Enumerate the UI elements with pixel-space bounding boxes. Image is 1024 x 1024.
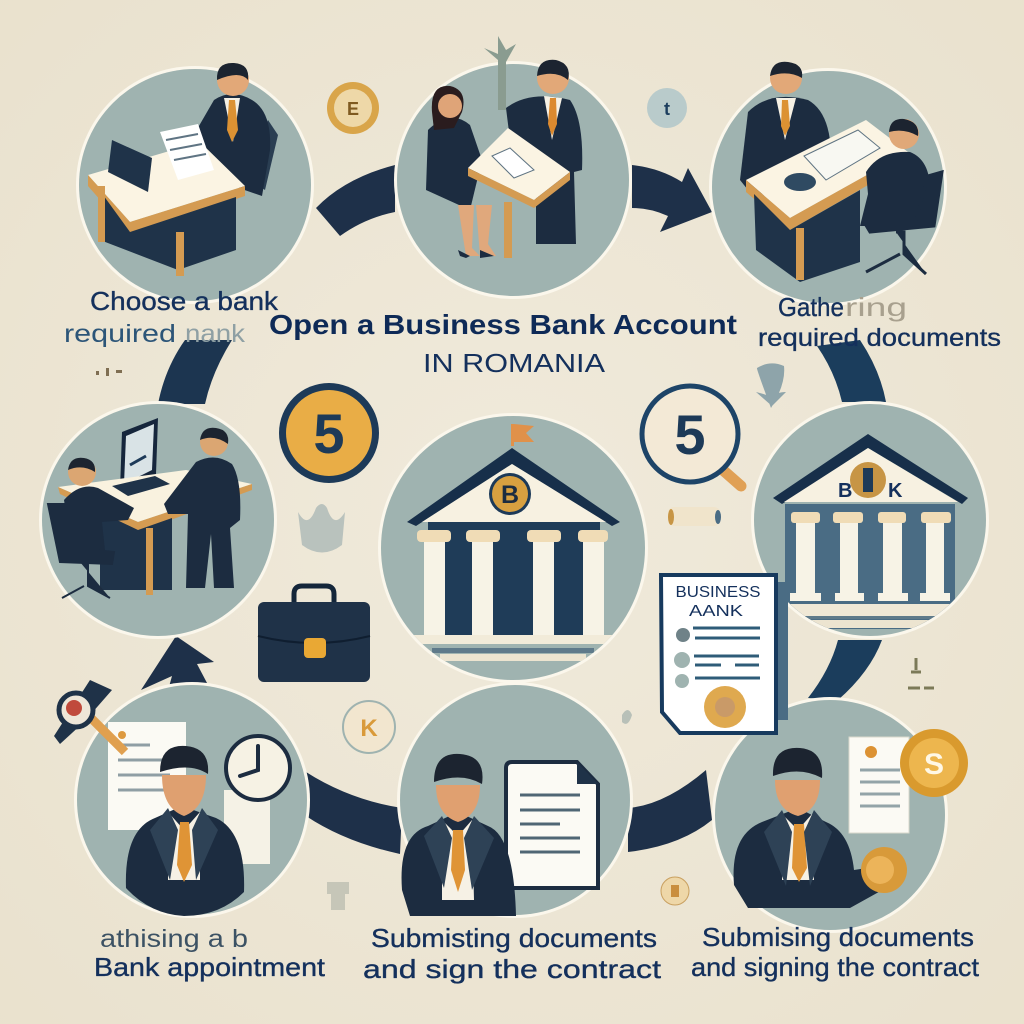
- small marks left: [96, 368, 122, 376]
- document: [506, 762, 598, 888]
- label: booking: athising a b: [100, 925, 248, 953]
- document: [108, 722, 186, 830]
- pediment: K: [888, 480, 903, 502]
- icon: small faded coin: [661, 877, 689, 905]
- pediment: B: [838, 480, 852, 502]
- icon: business document: [661, 575, 788, 733]
- label: submit documents: [363, 923, 662, 984]
- badge: number 5 gold: 5: [313, 402, 345, 465]
- laptop and papers: [108, 124, 214, 192]
- label: submit documents: Submisting documents: [371, 923, 657, 953]
- figure: businessman: [734, 748, 886, 908]
- icon: magnifier with 5: [642, 386, 741, 486]
- figure: standing man: [740, 62, 830, 200]
- second document: [224, 790, 270, 864]
- label: sign contract: [691, 922, 980, 982]
- label: choose a bank: nank: [185, 320, 246, 348]
- coin in hand: [861, 847, 907, 893]
- pediment: [773, 434, 968, 504]
- arrow: middle right to bottom right: [808, 640, 882, 700]
- small mark: center: [622, 710, 632, 724]
- pediment: [407, 448, 620, 526]
- icon: small leaf: [756, 363, 786, 408]
- small mark: lower right: [908, 658, 934, 688]
- icon: business document: AANK: [689, 603, 743, 620]
- title: [269, 309, 737, 378]
- panel: book appointment: [74, 682, 310, 918]
- label: booking: Bank appointment: [94, 952, 326, 982]
- icon: dollar coin: S: [924, 748, 944, 781]
- arrow: bottom left up to middle left: [141, 636, 216, 712]
- figure: man: [506, 60, 582, 244]
- label: choose a bank: [64, 286, 279, 348]
- arrow: top left to top middle: [316, 165, 395, 236]
- icon: coin outline: [343, 701, 395, 753]
- figure: seated client and chair: [860, 119, 942, 274]
- icon: dollar coin: [900, 729, 968, 797]
- columns: [790, 512, 951, 601]
- icon: grey crown: [298, 504, 345, 552]
- badge: number 5 gold: [279, 383, 379, 483]
- panel: sign contract: [712, 697, 948, 933]
- panel: choose a bank: [76, 63, 314, 304]
- decorative coin top right: [647, 88, 687, 128]
- label: gather documents: required documents: [758, 324, 1001, 352]
- icon: clock: [226, 736, 290, 800]
- panel: meeting at bank: [394, 36, 632, 299]
- icon: small scroll: [668, 507, 721, 526]
- label: choose a bank: Choose a bank: [90, 286, 279, 316]
- label: gather documents: ring: [845, 292, 907, 322]
- arrow: bottom middle to bottom left: [306, 772, 402, 854]
- label: gather documents: Gathe: [778, 292, 844, 322]
- document: [849, 737, 909, 833]
- figure: seated clerk and chair: [48, 458, 134, 598]
- desk: [58, 470, 252, 595]
- columns: [417, 530, 608, 636]
- desk: [88, 142, 245, 276]
- panel: online application: [39, 401, 277, 639]
- facade shadow: [428, 520, 600, 640]
- figure: woman: [426, 86, 496, 258]
- figure: businessman: [402, 754, 516, 916]
- flag: [511, 424, 534, 446]
- icon: small grey mark: [327, 882, 349, 910]
- facade shadow: [785, 504, 955, 629]
- icon: briefcase: [258, 586, 370, 682]
- label: choose a bank: required: [64, 320, 176, 348]
- panel: central bank: [378, 413, 648, 683]
- label: gather documents: [758, 292, 1001, 352]
- icon: magnifier with 5: 5: [674, 403, 706, 466]
- arrow: bottom right to bottom middle: [628, 770, 712, 852]
- icon: business document: BUSINESS: [676, 584, 760, 601]
- title: IN ROMANIA: [423, 348, 606, 378]
- panel: submit documents: [397, 682, 633, 918]
- steps: [790, 604, 950, 628]
- arrow: middle left to top left: [158, 340, 232, 404]
- icon: magnifier red: [54, 680, 125, 752]
- label: booking: [94, 925, 326, 982]
- computer monitor: [120, 418, 158, 490]
- icon: coin outline: K: [360, 715, 378, 742]
- pediment coin: [489, 473, 531, 515]
- figure: businessman: [126, 746, 244, 916]
- figure: banker: [185, 63, 278, 196]
- decorative coin top left: [327, 82, 379, 134]
- table: [468, 128, 570, 258]
- plant icon: [484, 36, 516, 110]
- desk: [746, 120, 908, 282]
- decorative coin top left: E: [347, 99, 359, 119]
- steps: [410, 635, 616, 661]
- figure: standing customer: [164, 428, 240, 588]
- pediment coin: B: [501, 481, 519, 509]
- decorative coin top right: t: [664, 99, 670, 119]
- title: Open a Business Bank Account: [269, 309, 737, 340]
- panel: gather documents: [709, 62, 947, 306]
- label: sign contract: Submising documents: [702, 922, 974, 952]
- label: submit documents: and sign the contract: [363, 954, 662, 984]
- arrow: top middle to top right: [632, 165, 712, 232]
- panel: right bank: [751, 401, 989, 639]
- label: sign contract: and signing the contract: [691, 952, 980, 982]
- arrow: top right to middle right: [817, 340, 886, 402]
